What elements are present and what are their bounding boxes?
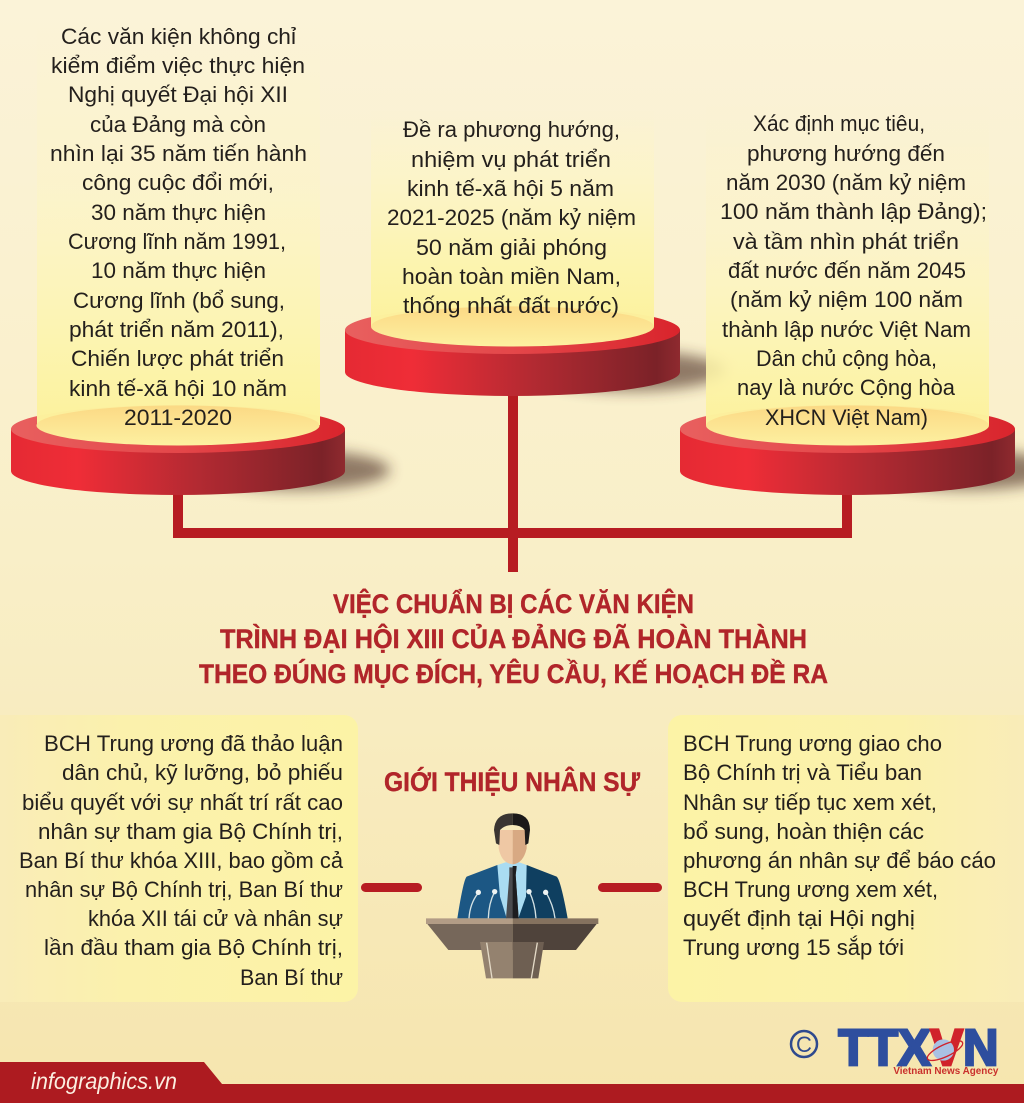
connector lines — [173, 380, 852, 572]
text: right column: XHCN Việt Nam) — [765, 405, 928, 430]
text: right column: 100 năm thành lập Đảng); — [720, 199, 987, 224]
panel: right personnel text: phương án nhân sự để báo cáo — [683, 848, 996, 873]
panel: left personnel text: khóa XII tái cử và nhân sự — [88, 906, 343, 931]
text: left column: 30 năm thực hiện — [91, 200, 266, 225]
text: left column: nhìn lại 35 năm tiến hành — [50, 141, 307, 166]
text: right column: Dân chủ cộng hòa, — [756, 346, 937, 371]
text: right column: (năm kỷ niệm 100 năm — [730, 287, 963, 312]
logo: TTXVN: TTXVN — [838, 1019, 998, 1076]
connector pills — [361, 883, 662, 892]
text: left column: kinh tế-xã hội 10 năm — [69, 376, 287, 401]
text: centre column: kinh tế-xã hội 5 năm — [407, 176, 614, 201]
text: left column: Chiến lược phát triển — [71, 346, 284, 371]
panel: right personnel text: Bộ Chính trị và Tiểu ban — [683, 760, 922, 785]
text: left column: của Đảng mà còn — [90, 112, 266, 137]
text: left column: công cuộc đổi mới, — [82, 170, 274, 195]
text: right column: phương hướng đến — [747, 141, 945, 166]
text: centre column: thống nhất đất nước) — [403, 293, 619, 318]
icon: copyright — [791, 1031, 817, 1057]
panel: right personnel text — [668, 715, 1024, 1002]
text: right column: đất nước đến năm 2045 — [728, 258, 966, 283]
podium: right — [680, 100, 1024, 495]
text: left column — [50, 24, 307, 430]
panel: right personnel text: quyết định tại Hội nghị — [683, 906, 915, 931]
panel: left personnel text: BCH Trung ương đã thảo luận — [44, 731, 343, 756]
panel: right personnel text: bổ sung, hoàn thiện các — [683, 819, 924, 844]
main heading: VIỆC CHUẨN BỊ CÁC VĂN KIỆN — [333, 588, 694, 619]
panel: right personnel text: BCH Trung ương xem xét, — [683, 877, 938, 902]
text: left column: Cương lĩnh (bổ sung, — [73, 288, 285, 313]
text: left column: 2011-2020 — [124, 405, 232, 430]
text: left column: 10 năm thực hiện — [91, 258, 266, 283]
main heading — [199, 588, 828, 689]
main heading: TRÌNH ĐẠI HỘI XIII CỦA ĐẢNG ĐÃ HOÀN THÀNH — [220, 622, 807, 654]
panel: right personnel text: BCH Trung ương giao cho — [683, 731, 942, 756]
text: left column: phát triển năm 2011), — [69, 317, 284, 342]
text: centre column — [387, 117, 636, 318]
main heading: THEO ĐÚNG MỤC ĐÍCH, YÊU CẦU, KẾ HOẠCH ĐỀ RA — [199, 658, 828, 689]
panel: left personnel text: Ban Bí thư — [240, 965, 343, 990]
text: centre column: 50 năm giải phóng — [416, 235, 607, 260]
panel: left personnel text: lần đầu tham gia Bộ Chính trị, — [44, 935, 343, 960]
text: left column: Các văn kiện không chỉ — [61, 24, 296, 49]
text: centre column: hoàn toàn miền Nam, — [402, 264, 621, 289]
panel: right personnel text: Nhân sự tiếp tục xem xét, — [683, 790, 937, 815]
text: right column: và tầm nhìn phát triển — [733, 229, 959, 254]
text: right column: năm 2030 (năm kỷ niệm — [726, 170, 966, 195]
podium: centre — [345, 110, 725, 396]
text: right column: thành lập nước Việt Nam — [722, 317, 971, 342]
icon: copyright: C — [796, 1032, 812, 1057]
panel: left personnel text: nhân sự tham gia Bộ Chính trị, — [38, 819, 343, 844]
text: left column: kiểm điểm việc thực hiện — [51, 53, 305, 78]
footer bar — [0, 1062, 1024, 1103]
panel: right personnel text: Trung ương 15 sắp tới — [683, 935, 904, 960]
footer label: infographics.vn — [31, 1068, 177, 1094]
text: right column: nay là nước Cộng hòa — [737, 375, 956, 400]
text: centre column: Đề ra phương hướng, — [403, 117, 620, 142]
text: right column: Xác định mục tiêu, — [753, 111, 925, 136]
text: centre column: 2021-2025 (năm kỷ niệm — [387, 205, 636, 230]
panel: left personnel text: Ban Bí thư khóa XIII, bao gồm cả — [19, 848, 344, 873]
panel: left personnel text: biểu quyết với sự nhất trí rất cao — [22, 790, 343, 815]
panel: left personnel text: dân chủ, kỹ lưỡng, bỏ phiếu — [62, 760, 343, 785]
text: left column: Nghị quyết Đại hội XII — [68, 82, 288, 107]
podium: left — [11, 20, 390, 495]
text: left column: Cương lĩnh năm 1991, — [68, 229, 286, 254]
text: centre column: nhiệm vụ phát triển — [411, 147, 611, 172]
text: right column — [720, 111, 987, 430]
panel: left personnel text — [0, 715, 358, 1002]
icon: speaker at lectern — [426, 813, 598, 978]
logo: TTXVN: Vietnam News Agency — [893, 1066, 999, 1077]
heading: personnel: GIỚI THIỆU NHÂN SỰ — [384, 766, 641, 797]
panel: left personnel text: nhân sự Bộ Chính trị, Ban Bí thư — [25, 877, 343, 902]
